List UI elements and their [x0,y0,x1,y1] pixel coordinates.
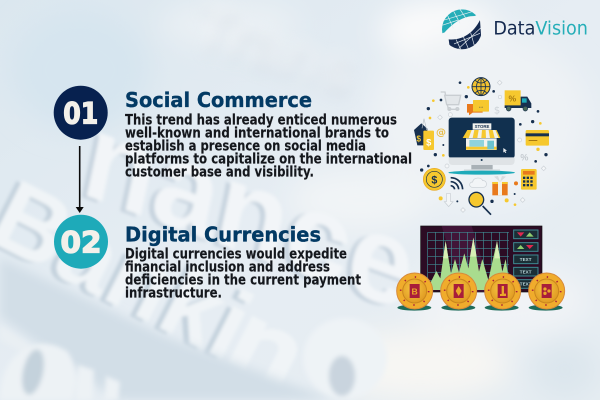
text block: Social Commerce: platforms to capitalize on the international [125,152,412,168]
coin: bitcoin: B [412,286,418,296]
arrow: step 01 to step 02 [76,146,84,213]
icon: wifi [451,178,463,189]
icon: dollar coin: $ [431,174,437,186]
letter shapes: bottom-left word [0,325,120,400]
letter fragment near bottom [303,318,387,398]
wordmark: DataVision [493,17,588,39]
icon: shopping cart [441,92,461,110]
coin shadows [397,305,563,311]
heading: Digital Currencies: Digital Currencies [125,223,321,247]
coin: ripple [529,273,565,309]
text block: Social Commerce [125,112,412,181]
coin: litecoin [485,273,521,309]
text block: Digital Currencies: financial inclusion and address [125,259,330,275]
icon: globe [472,78,490,96]
text block: Social Commerce: customer base and visibility. [125,165,314,181]
word: Finance: nance [74,86,428,337]
illustration: e-commerce icons [414,78,549,215]
area chart [431,238,509,290]
icon: globe [442,9,482,49]
chart panel: TEXT [520,257,532,263]
icon: gift [492,176,508,195]
step 01 badge: 01 [63,96,98,130]
icon: price tags [414,119,434,150]
text block: Digital Currencies: infrastructure. [125,285,222,301]
icon: percent: % [520,153,528,163]
heading: Social Commerce: Social Commerce [125,88,312,112]
grid [428,232,509,290]
icon: faded dollar: $ [494,105,500,116]
step 02 badge: 02 [60,226,102,260]
chart panel [421,226,542,292]
letter shape: n [228,316,303,389]
icon: download arrow [444,194,453,207]
icon: at sign: @ [436,128,446,139]
decorative dots [420,81,548,203]
coin: ethereum [441,273,477,309]
icon: delivery truck: % [508,94,516,104]
step 02 badge [54,215,108,269]
text block: Social Commerce: establish a presence on social media [125,138,366,154]
icon: price tags: $ [416,135,421,144]
logo: DataVision [442,9,588,49]
text block: Social Commerce: well-known and international brands to [125,125,389,141]
icon: credit card [526,130,549,146]
icon: magnifier [469,192,491,215]
text block: Digital Currencies: Digital currencies would expedite [125,246,347,262]
text block: Digital Currencies: deficiencies in the current payment [125,272,361,288]
step 01 badge [54,86,108,140]
illustration: crypto chart and coins [397,226,565,311]
store: STORE [475,124,490,129]
text block: Social Commerce: This trend has already enticed numerous [125,112,397,128]
coin: bitcoin [397,273,433,309]
chart panel: TEXT [520,269,532,275]
indicator buttons [514,230,538,288]
icon: cloud [470,178,487,187]
word: Finance: nance [68,87,422,338]
chart panel: TEXT [520,282,532,288]
icon: calculator [521,169,537,190]
icon: price tags: $ [426,137,432,147]
diagonal band [0,258,333,400]
text block: Digital Currencies [125,246,361,301]
icon: chat bubbles: ... [479,103,483,108]
